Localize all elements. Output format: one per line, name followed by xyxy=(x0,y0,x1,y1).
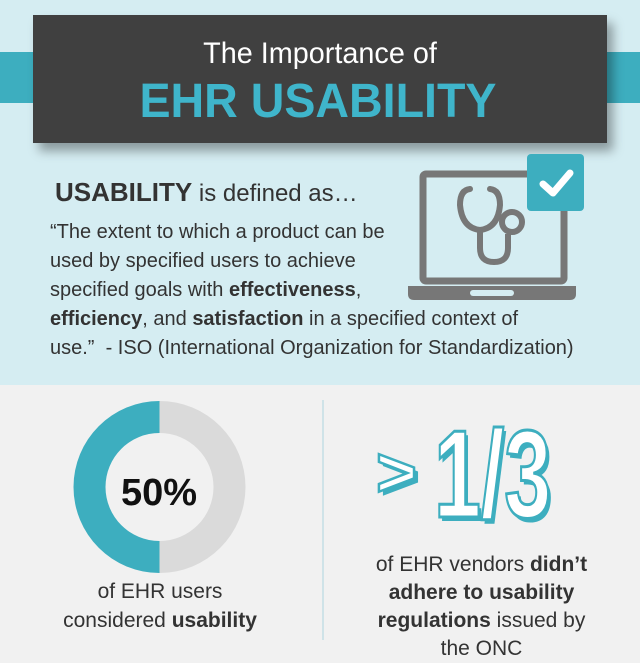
title line 1: The Importance of xyxy=(203,37,437,70)
stat caption: the ONC xyxy=(441,637,522,660)
stat caption: adhere to usability xyxy=(389,581,574,604)
icon: checkmark badge xyxy=(527,154,584,211)
definition text xyxy=(50,221,574,359)
donut chart 50% xyxy=(74,401,246,573)
icon: laptop with stethoscope xyxy=(408,154,584,300)
big stat >1/3: > xyxy=(376,433,417,511)
stat caption xyxy=(376,553,587,660)
donut caption: considered usability xyxy=(63,609,257,632)
top background xyxy=(0,0,640,385)
definition text: efficiency, and satisfaction in a specified context of xyxy=(50,308,518,330)
stat caption: of EHR vendors didn’t xyxy=(376,553,587,576)
donut chart 50%: 50% xyxy=(121,472,197,514)
definition text: used by specified users to achieve xyxy=(50,250,356,272)
big stat >1/3: > xyxy=(380,437,421,515)
definition text: use.” - ISO (International Organization for Standardization) xyxy=(50,337,574,359)
stat caption: regulations issued by xyxy=(378,609,585,632)
big stat >1/3 xyxy=(376,415,554,535)
divider xyxy=(322,400,324,640)
teal band xyxy=(0,52,640,103)
heading: usability defined: USABILITY is defined as… xyxy=(55,177,358,207)
title box xyxy=(33,15,607,143)
definition text: specified goals with effectiveness, xyxy=(50,279,361,301)
donut caption: of EHR users xyxy=(98,580,222,603)
donut caption xyxy=(63,580,257,632)
definition text: “The extent to which a product can be xyxy=(50,221,385,243)
title line 2: EHR USABILITY xyxy=(140,75,496,128)
